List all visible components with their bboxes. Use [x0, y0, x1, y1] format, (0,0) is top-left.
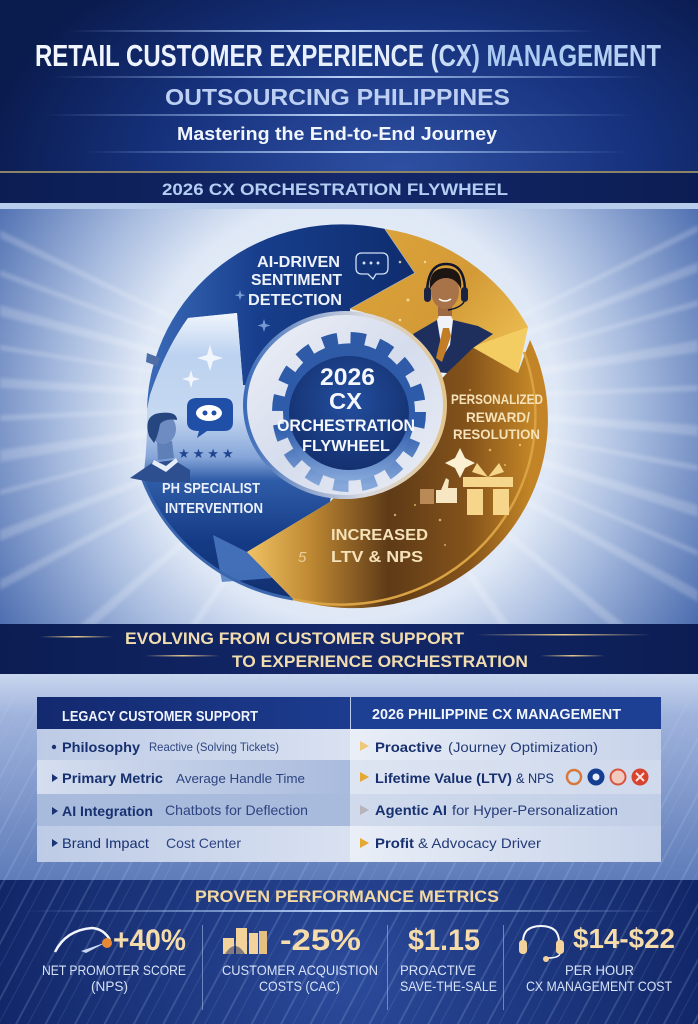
metric: customer acquisition costs: CUSTOMER ACQUISTION	[222, 962, 378, 978]
flywheel segment: PH specialist intervention: PH SPECIALIST	[162, 480, 260, 497]
metric: hourly CX management cost	[519, 923, 675, 994]
chart: flywheel	[130, 224, 548, 608]
row: profit: Profit	[375, 835, 414, 851]
hub label	[277, 364, 415, 455]
section heading: evolving band: EVOLVING FROM CUSTOMER SUPPORT	[125, 629, 465, 648]
hub label: ORCHESTRATION	[277, 416, 415, 435]
icon: chart blocks	[223, 928, 267, 954]
row: philosophy: Philosophy	[62, 739, 140, 755]
icon: gauge	[55, 928, 112, 953]
icons: channel badges	[567, 768, 648, 786]
row: agentic AI: for Hyper-Personalization	[452, 802, 618, 818]
flywheel segment: PH specialist intervention: INTERVENTION	[165, 500, 263, 517]
section heading: evolving band: TO EXPERIENCE ORCHESTRATION	[232, 652, 528, 671]
comparison table	[37, 697, 661, 862]
panel: proven performance metrics	[0, 880, 698, 1024]
row: AI integration: Chatbots for Deflection	[165, 802, 308, 818]
icon: sparkles	[182, 345, 223, 388]
icon: diamond sparkle	[445, 448, 475, 478]
icon: gift box	[463, 463, 513, 515]
flywheel segment: personalized reward and resolution	[247, 229, 548, 608]
flywheel segment: increased LTV and NPS: INCREASED	[331, 527, 428, 544]
metric: net promoter score: (NPS)	[91, 978, 128, 994]
metric: proactive save-the-sale: $1.15	[408, 924, 480, 957]
hub label: CX	[329, 388, 363, 414]
metric: hourly CX management cost: CX MANAGEMENT COST	[526, 978, 672, 994]
metric: net promoter score	[42, 924, 186, 994]
icon: speech bubble	[187, 398, 233, 438]
row: proactive	[360, 739, 598, 755]
row: primary metric	[52, 770, 305, 786]
row: AI integration: AI Integration	[62, 803, 153, 819]
icon: rating stars: ★★★★	[178, 447, 237, 462]
flywheel hub	[243, 311, 447, 499]
icon: thumbs up	[420, 478, 457, 504]
row: proactive: (Journey Optimization)	[448, 739, 598, 755]
row: lifetime value: Lifetime Value (LTV)	[375, 770, 512, 786]
metric: hourly CX management cost: PER HOUR	[565, 962, 634, 978]
row: philosophy: Reactive (Solving Tickets)	[149, 740, 279, 754]
icon: sparkle five: 5	[298, 549, 307, 566]
column: 2026 Philippine CX management: 2026 PHILIPPINE CX MANAGEMENT	[372, 706, 621, 723]
tagline: Mastering the End-to-End Journey	[177, 124, 497, 144]
icon: support agent	[413, 264, 493, 373]
metric: proactive save-the-sale	[400, 924, 497, 994]
section heading: flywheel band	[0, 171, 698, 203]
panel: flywheel background	[0, 203, 698, 625]
row: primary metric: Average Handle Time	[176, 771, 305, 786]
metric: proactive save-the-sale: PROACTIVE	[400, 962, 476, 978]
column: legacy customer support	[37, 697, 350, 862]
hub label: FLYWHEEL	[302, 438, 390, 455]
subtitle: outsourcing: OUTSOURCING PHILIPPINES	[165, 84, 510, 110]
flywheel segment: AI-driven sentiment detection: DETECTION	[248, 292, 342, 309]
row: lifetime value: & NPS	[516, 770, 554, 786]
header panel	[0, 0, 698, 172]
row: profit: & Advocacy Driver	[418, 835, 541, 851]
metric: net promoter score: +40%	[113, 924, 186, 957]
section heading: evolving band	[0, 624, 698, 674]
metric: customer acquisition costs: COSTS (CAC)	[259, 978, 340, 994]
row: agentic AI: Agentic AI	[375, 802, 447, 818]
hub label: 2026	[320, 364, 375, 391]
flywheel segment: AI-driven sentiment detection: AI-DRIVEN	[257, 254, 340, 271]
metric: net promoter score: NET PROMOTER SCORE	[42, 962, 186, 978]
icon: headset	[519, 926, 564, 962]
metric: hourly CX management cost: $14-$22	[573, 923, 675, 954]
panel: comparison background	[0, 674, 698, 880]
flywheel segment: personalized reward and resolution: REWARD/	[466, 409, 530, 425]
flywheel segment: AI-driven sentiment detection	[146, 224, 415, 410]
column: 2026 Philippine CX management	[350, 697, 661, 862]
icon: chat bubble outline	[356, 253, 388, 279]
row: philosophy	[52, 739, 279, 755]
flywheel segment: increased LTV and NPS	[298, 527, 428, 566]
icon: gear	[278, 338, 420, 486]
row: agentic AI	[360, 802, 618, 818]
row: AI integration	[52, 802, 308, 819]
row: brand impact: Brand Impact	[62, 835, 149, 851]
flywheel segment: PH specialist intervention	[130, 313, 347, 599]
row: brand impact	[52, 835, 241, 851]
section heading: flywheel band: 2026 CX ORCHESTRATION FLYWHEEL	[162, 180, 508, 199]
metric: customer acquisition costs	[222, 924, 378, 994]
flywheel segment: AI-driven sentiment detection: SENTIMENT	[251, 272, 342, 289]
row: proactive: Proactive	[375, 739, 442, 755]
column: legacy customer support: LEGACY CUSTOMER SUPPORT	[62, 708, 258, 725]
flywheel segment: personalized reward and resolution: RESOLUTION	[453, 426, 540, 442]
row: profit	[360, 835, 541, 851]
metric: proactive save-the-sale: SAVE-THE-SALE	[400, 978, 497, 994]
icon: specialist silhouette	[130, 413, 190, 482]
row: primary metric: Primary Metric	[62, 770, 163, 786]
row: brand impact: Cost Center	[166, 835, 241, 851]
heading: metrics: PROVEN PERFORMANCE METRICS	[195, 887, 499, 906]
flywheel segment: increased LTV and NPS: LTV & NPS	[331, 549, 423, 566]
flywheel segment: personalized reward and resolution: PERSONALIZED	[451, 391, 543, 407]
row: lifetime value	[360, 768, 648, 786]
metric: customer acquisition costs: -25%	[280, 924, 361, 957]
